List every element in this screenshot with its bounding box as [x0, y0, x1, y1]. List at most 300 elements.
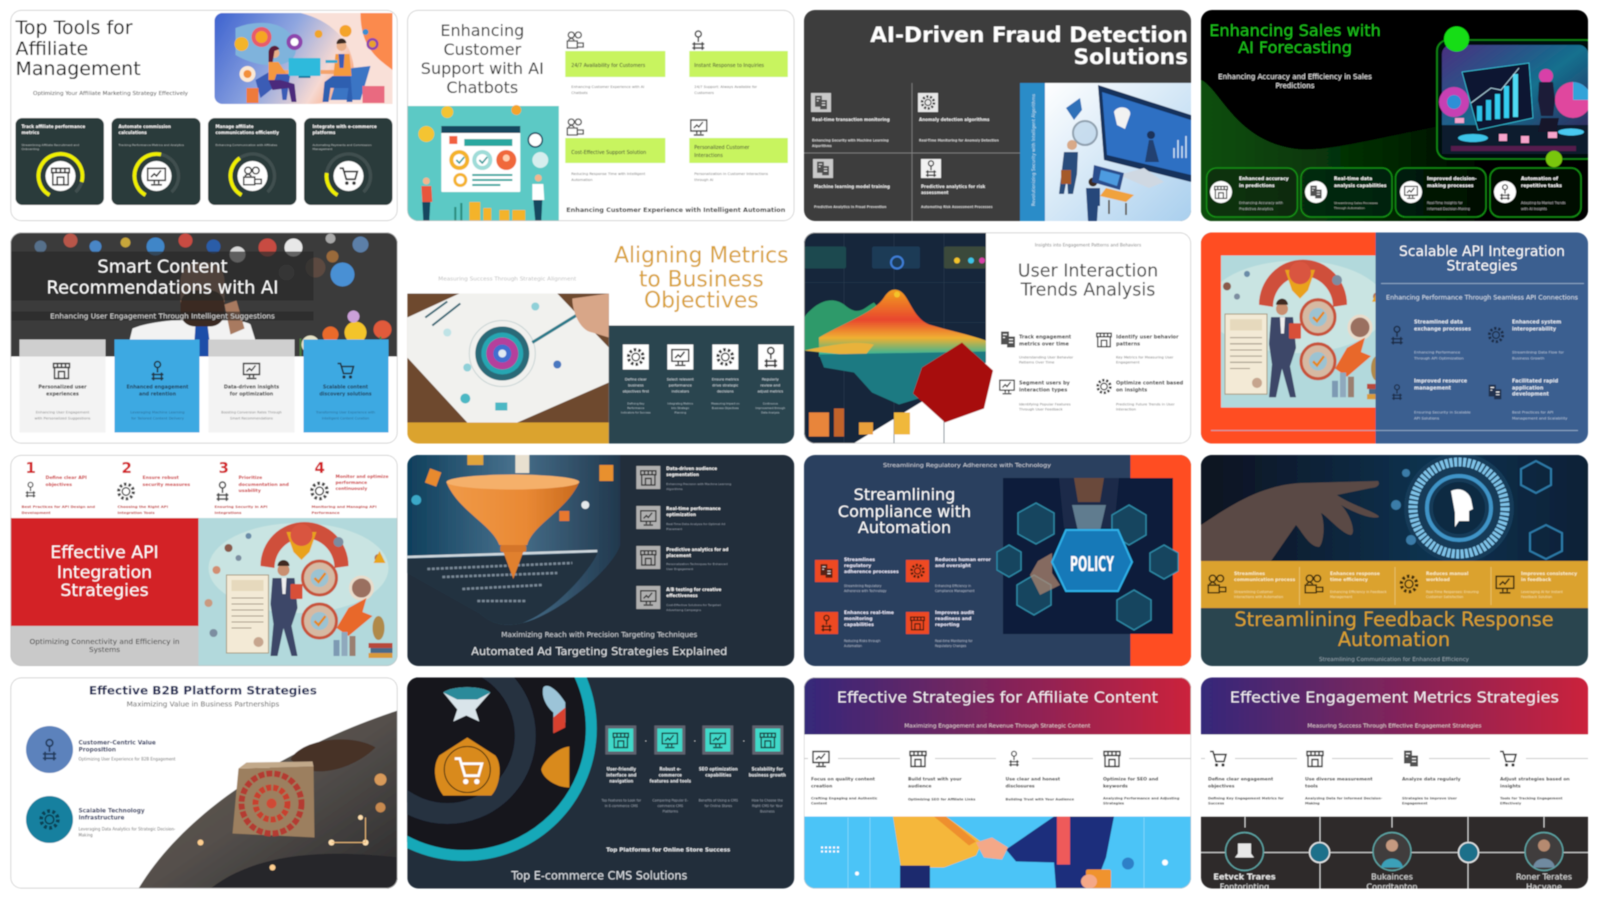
item: Use clear and honest disclosures [1006, 751, 1075, 802]
step: SEO optimization capabilities: for Online Stores [704, 804, 732, 808]
item: Enhanced accuracy in predictions: Enhanced accuracy [1239, 176, 1289, 182]
panel: Aligning Metrics to Business Objectives [407, 232, 794, 444]
title: Chatbots [446, 78, 518, 97]
step 1: Define clear API objectives: Best Practices for API Design and [22, 504, 95, 509]
item: Optimize content based on insights: on insights [1116, 388, 1147, 394]
item: Real-time transaction monitoring: Real-time transaction monitoring [812, 117, 890, 122]
item: Enhances real-time monitoring capabilities: monitoring [844, 616, 873, 622]
title: Automation [1338, 628, 1450, 651]
item: Improved resource management: management [1414, 386, 1452, 392]
panel: User Interaction Trends Analysis [804, 232, 1191, 444]
step 2: Ensure robust security measures [118, 459, 190, 515]
item: Enhances response time efficiency: Management [1330, 595, 1353, 599]
column: Personalized user experiences: with Personalized Suggestions [35, 416, 91, 420]
item: Real-time data analysis capabilities: analysis capabilities [1334, 183, 1387, 189]
column: Personalized user experiences [20, 340, 106, 432]
title: AI Forecasting [1238, 38, 1352, 57]
illustration: quality assurance businessman [198, 518, 398, 666]
item: Adjust strategies based on insights: insights [1500, 784, 1521, 790]
item: Improves consistency in feedback [1496, 571, 1577, 599]
item: Analyze data regularly [1402, 750, 1461, 806]
item: Reduces manual workload [1401, 571, 1479, 599]
step 1: Define clear API objectives [22, 459, 95, 515]
item: Streamlines communication process: communication process [1234, 577, 1295, 583]
subtitle: Streamlining Regulatory Adherence with Technology [883, 463, 1052, 469]
subtitle band: Enhancing User Engagement Through Intelligent Suggestions [50, 312, 275, 320]
item: A/B testing for creative effectiveness: Advertising Campaigns [666, 608, 701, 612]
item: Predictive analytics for risk assessment: Automating Risk Assessment Processes [921, 205, 993, 209]
title: Solutions [1074, 45, 1188, 70]
item: Streamlines communication process: Streamlining Customer [1234, 590, 1274, 594]
photo: orange funnel above laptop [407, 455, 620, 625]
item: Analyze data regularly: Engagement [1402, 802, 1428, 806]
item: Use diverse measurement tools [1305, 752, 1383, 806]
item: Automation of repetitive tasks: Automation of [1521, 176, 1559, 182]
item: Streamlines communication process: Streamlines [1234, 571, 1265, 577]
item: Focus on quality content creation: Content [811, 802, 827, 806]
step 4: Monitor and optimize performance continuously: Monitoring and Managing API [312, 504, 377, 509]
item: Optimize for SEO and keywords: Analyzing Performance and Adjusting [1103, 796, 1180, 800]
panel: Effective B2B Platform Strategies [10, 678, 398, 888]
title: Automated Ad Targeting Strategies Explained [471, 646, 727, 658]
title band: Smart Content [97, 256, 228, 278]
metric: Ensure metrics drive strategic decisions: drive strategic [712, 384, 738, 388]
step: SEO optimization capabilities: Benefits of Using a CMS [699, 798, 738, 802]
item: Segment users by interaction types: Identifying Popular Features [1019, 402, 1071, 406]
title: Strategies [1447, 258, 1517, 274]
vertical blue band with tagline: Revolutionizing Security with Intelligent Algorithms [1031, 93, 1037, 206]
item: Improves audit readiness and reporting: Real-time Monitoring for [935, 639, 973, 643]
panel: Automated Ad Targeting Strategies Explained [407, 455, 794, 666]
item: Improves audit readiness and reporting: Improves audit [935, 610, 975, 616]
metric: Select relevant performance indicators: performance [669, 384, 693, 388]
item: Enhances response time efficiency: Enhances response [1330, 571, 1380, 577]
step 2: Ensure robust security measures: Integration Tools [118, 510, 155, 515]
item: Customer-Centric Value Proposition: Customer-Centric Value [78, 740, 156, 746]
title: AI-Driven Fraud Detection [870, 23, 1188, 48]
panel: Effective Strategies for Affiliate Content [804, 678, 1191, 888]
item: Instant Response to Inquiries [689, 31, 788, 95]
item: Use diverse measurement tools: Making [1305, 802, 1320, 806]
panel: Top Tools for Affiliate Management [10, 10, 398, 221]
item: Identify user behavior patterns [1097, 333, 1179, 364]
item: Build trust with your audience: Build trust with your [908, 776, 962, 782]
item: Streamlines regulatory adherence processes: Streamlining Regulatory [844, 584, 882, 588]
item: Optimize content based on insights: Interaction [1116, 408, 1137, 412]
item: Segment users by interaction types: interaction types [1019, 388, 1067, 394]
item: Data-driven audience segmentation: Enhancing Precision with Machine Learning [666, 482, 731, 486]
column: Personalized user experiences: Enhancing User Engagement [36, 410, 90, 414]
title block [10, 518, 198, 626]
item: Enhances response time efficiency: time efficiency [1330, 577, 1368, 583]
metric: Ensure metrics drive strategic decisions: Ensure metrics [712, 378, 739, 382]
step: Scalability for business growth [749, 726, 786, 814]
item: Track engagement metrics over time: metrics over time [1019, 342, 1069, 348]
item: Real-time performance optimization: Placement [666, 527, 683, 531]
item: Cost-Effective Support Solution: Automation [571, 178, 593, 182]
item: Enhanced accuracy in predictions: Predictive Analytics [1239, 207, 1273, 211]
item: Enhanced system interoperability: Streamlining Data Flow for [1512, 350, 1564, 354]
item: 24/7 Availability for Customers: Enhancing Customer Experience with AI [571, 85, 644, 89]
item: Define clear engagement objectives: Defining Key Engagement Metrics for [1208, 796, 1284, 800]
subtitle: Predictions [1276, 81, 1315, 90]
header gradient band: Measuring Success Through Effective Engagement Strategies [1307, 724, 1482, 730]
item: Predictive analytics for ad placement: placement [666, 553, 691, 558]
item: Cost-Effective Support Solution: Reducing Response Time with Intelligent [571, 172, 646, 176]
step 4: Monitor and optimize performance continuously: Monitor and optimize [336, 474, 388, 480]
item: Enhances real-time monitoring capabilities: Reducing Risks through [844, 639, 881, 643]
item: Predictive analytics for risk assessment: Predictive analytics for risk [921, 184, 986, 189]
step: User-friendly interface and navigation: navigation [609, 778, 633, 784]
subtitle: Insights into Engagement Patterns and Behaviors [1035, 242, 1142, 248]
feature card: Integrate with e-commerce platforms: Integrate with e-commerce [312, 124, 377, 129]
item: Define clear engagement objectives: Success [1208, 802, 1224, 806]
step: SEO optimization capabilities: SEO optimization [699, 766, 738, 772]
photo: connected people network: Roner Terates [1516, 872, 1572, 882]
item: Improved decision-making processes [1396, 168, 1486, 217]
title: Customer [443, 40, 522, 59]
title: to Business [639, 268, 764, 292]
item: Reduces human error and oversight: Compliance Management [935, 589, 975, 593]
footer tagline: Enhancing Customer Experience with Intelligent Automation [566, 208, 785, 214]
step 3: Prioritize documentation and usability: Ensuring Security in API [214, 504, 268, 509]
metric: Select relevant performance indicators: Planning [675, 410, 686, 414]
item: Real-time transaction monitoring: Enhancing Security with Machine Learning [812, 138, 889, 142]
step 3: Prioritize documentation and usability: usability [238, 488, 261, 494]
item: Improved resource management: API Solutions [1414, 416, 1439, 420]
step: Scalability for business growth: Business [760, 810, 775, 814]
feature card: Manage affiliate communications efficiently: Enhancing Communication with Affiliates [216, 143, 278, 147]
step 2: Ensure robust security measures: 2 [122, 459, 132, 477]
item: Use diverse measurement tools: Use diverse measurement [1305, 776, 1373, 782]
item: Focus on quality content creation: Focus on quality content [811, 776, 876, 782]
feature card: Manage affiliate communications efficiently [208, 118, 296, 206]
step 2: Ensure robust security measures: Choosing the Right API [118, 504, 169, 509]
item: Improved resource management [1392, 378, 1471, 420]
feature card: Automate commission calculations: Tracking Performance Metrics and Analytics [118, 143, 184, 147]
item: Improves consistency in feedback: Leveraging AI for Instant [1521, 590, 1564, 594]
column: Scalable content discovery solutions: Intelligent Content Curation [322, 416, 369, 420]
item: 24/7 Availability for Customers: Chatbots [571, 91, 588, 95]
title block: Strategies [60, 581, 149, 601]
item: Enhanced accuracy in predictions [1207, 168, 1297, 217]
photo: hand touching holographic support icon [1201, 453, 1588, 563]
item: Automation of repetitive tasks: with AI Insights [1521, 207, 1547, 211]
item: Real-time performance optimization: Real-time performance [666, 506, 721, 511]
item: Streamlined data exchange processes: Enhancing Performance [1414, 350, 1461, 354]
step: User-friendly interface and navigation [601, 726, 642, 808]
item: Personalized Customer Interactions: through AI [694, 178, 713, 182]
panel: Top E-commerce CMS Solutions [337, 602, 794, 888]
item: Customer-Centric Value Proposition: Optimizing User Experience for B2B Engagement [78, 756, 176, 762]
subtitle: Maximizing Reach with Precision Targeting Techniques [501, 631, 698, 639]
grid lines [804, 83, 1020, 221]
timeline connectors [804, 758, 1191, 760]
subtitle: Streamlining Communication for Enhanced Efficiency [1319, 657, 1469, 663]
column: Data-driven insights for optimization: Smart Recommendations [230, 416, 273, 420]
item: Define clear engagement objectives: objectives [1208, 784, 1235, 790]
item: Personalized Customer Interactions [689, 120, 788, 182]
item: Reduces manual workload: workload [1426, 577, 1450, 583]
item: Improved resource management: Improved resource [1414, 378, 1468, 384]
item: Optimize for SEO and keywords: Strategies [1103, 802, 1124, 806]
metric: Define clear business objectives first: Indicators for Success [621, 410, 651, 414]
item: Personalized Customer Interactions: Personalized Customer [694, 145, 749, 151]
metric: Define clear business objectives first: Defining Key [627, 402, 645, 406]
item: Streamlined data exchange processes [1391, 320, 1471, 360]
item: Track engagement metrics over time [1001, 332, 1074, 364]
item: Enhances real-time monitoring capabilities [815, 610, 894, 648]
metric: Regularly review and adjust metrics: Regularly [762, 378, 780, 382]
item: Real-time transaction monitoring [811, 93, 890, 148]
step: User-friendly interface and navigation: in E-commerce CMS [605, 804, 638, 808]
item: Facilitated rapid application development: Best Practices for API [1512, 410, 1553, 414]
item: Improved decision-making processes: Real-Time Insights for [1427, 201, 1463, 205]
feature card: Manage affiliate communications efficiently: Manage affiliate [216, 124, 254, 129]
feature card: Track affiliate performance metrics: Streamlining Affiliate Recruitment and [22, 143, 79, 147]
column: Data-driven insights for optimization [208, 340, 294, 432]
column: Scalable content discovery solutions [304, 340, 388, 432]
title: Objectives [644, 288, 759, 314]
panel: Streamlining Feedback Response Automation [1201, 453, 1588, 666]
title: User Interaction [1018, 262, 1158, 282]
vertical blue band with tagline [1020, 83, 1046, 221]
item: Streamlines regulatory adherence processes: regulatory [844, 563, 871, 569]
decorative lime circle [1546, 151, 1562, 167]
item: Anomaly detection algorithms: Real-Time Monitoring for Anomaly Detection [919, 138, 999, 142]
column: Data-driven insights for optimization: Boosting Conversion Rates Through [221, 410, 282, 414]
photo: connected people network: Conrdtanton [1366, 882, 1418, 892]
item: Optimize for SEO and keywords: Optimize for SEO and [1103, 776, 1158, 782]
item: Automation of repetitive tasks: repetitive tasks [1521, 183, 1562, 189]
title: Compliance with [838, 502, 971, 521]
item: Streamlined data exchange processes: Through API Optimization [1413, 356, 1464, 360]
column: Enhanced engagement and retention: Leveraging Machine Learning [130, 410, 185, 414]
item: Cost-Effective Support Solution: Cost-Effective Support Solution [571, 150, 646, 156]
item: A/B testing for creative effectiveness: Cost-Effective Solutions for Targeted [666, 603, 721, 607]
orange left block [1201, 232, 1376, 444]
gold feature band [1201, 561, 1588, 608]
item: Personalized Customer Interactions: Personalization in Customer Interactions [694, 172, 768, 176]
column: Data-driven insights for optimization: Data-driven insights [224, 384, 279, 390]
panel: Scalable API Integration Strategies [1197, 232, 1588, 444]
step 4: Monitor and optimize performance continuously: continuously [336, 486, 367, 492]
photo: policy hexagons [997, 478, 1178, 634]
step: Robust e-commerce features and tools: commerce [659, 772, 682, 778]
title: Affiliate [16, 38, 88, 60]
subtitle block: Systems [89, 645, 120, 654]
subtitle: Top Platforms for Online Store Success [606, 848, 731, 854]
item: Improves consistency in feedback: Feedback Solution [1521, 595, 1552, 599]
step 4: Monitor and optimize performance continuously: performance [336, 480, 367, 486]
metric: Regularly review and adjust metrics: adjust metrics [757, 390, 783, 394]
metric: Define clear business objectives first: business [628, 384, 644, 388]
metric: Regularly review and adjust metrics: review and [760, 384, 780, 388]
item: Track engagement metrics over time: Track engagement [1019, 334, 1072, 340]
title: Top Tools for [14, 17, 133, 39]
item: Optimize for SEO and keywords [1103, 752, 1180, 806]
title: Effective B2B Platform Strategies [89, 684, 317, 698]
column: Enhanced engagement and retention: for Tailored Content Delivery [131, 416, 185, 420]
title: Support with AI [421, 59, 544, 78]
item: Streamlines regulatory adherence processes: Streamlines [844, 557, 875, 563]
item: Track engagement metrics over time: Patterns Over Time [1019, 360, 1055, 364]
feature card: Automate commission calculations [112, 118, 200, 206]
step: User-friendly interface and navigation: interface and [606, 772, 637, 778]
illustration: business handshake [804, 816, 1191, 888]
item: Reduces human error and oversight: and oversight [935, 563, 972, 569]
item: Streamlines regulatory adherence processes [815, 557, 899, 593]
item: Machine learning model training: Machine learning model training [814, 184, 890, 189]
item: Anomaly detection algorithms [918, 93, 999, 142]
item: Real-time data analysis capabilities: Real-time data [1334, 176, 1372, 182]
step 3: Prioritize documentation and usability [214, 459, 289, 515]
background photo: man with social bubbles and flowers [10, 232, 398, 356]
item: Identify user behavior patterns: Engagement [1116, 360, 1140, 364]
item: Real-time transaction monitoring: Algorithms [812, 144, 832, 148]
item: Identify user behavior patterns: Key Metrics for Measuring User [1116, 356, 1174, 360]
step 3: Prioritize documentation and usability: Prioritize [238, 475, 262, 481]
step 4: Monitor and optimize performance continuously: Performance [312, 510, 340, 515]
item: Enhanced system interoperability: interoperability [1512, 326, 1557, 332]
item: Facilitated rapid application development [1489, 378, 1568, 420]
step 3: Prioritize documentation and usability: 3 [218, 459, 229, 477]
title block: Effective API [50, 543, 159, 563]
illustration: two people at a table [214, 13, 392, 104]
item: Track engagement metrics over time: Understanding User Behavior [1019, 356, 1074, 360]
item: Streamlined data exchange processes: Streamlined data [1414, 320, 1463, 326]
subtitle block: Optimizing Connectivity and Efficiency in [29, 637, 180, 646]
item: Facilitated rapid application development: Facilitated rapid [1512, 378, 1559, 384]
item: Real-time performance optimization: optimization [666, 512, 696, 517]
item: Predictive analytics for ad placement [636, 546, 728, 571]
item: Improves consistency in feedback: in feedback [1521, 577, 1552, 583]
step: Scalability for business growth: Right CMS for Your [752, 804, 783, 808]
item: Identify user behavior patterns: patterns [1116, 342, 1140, 348]
illustration: sales chart and robot [1437, 40, 1597, 159]
title: Top E-commerce CMS Solutions [510, 870, 687, 882]
item: Enhanced system interoperability: Enhanced system [1512, 320, 1561, 326]
item: Enhances response time efficiency [1305, 571, 1387, 599]
item: Scalable Technology Infrastructure: Leveraging Data Analytics for Strategic Decision- [78, 826, 176, 832]
item: Scalable Technology Infrastructure: Making [78, 832, 93, 838]
item: Real-time performance optimization [636, 506, 725, 531]
item: Predictive analytics for ad placement: User Engagement [666, 567, 694, 571]
item: Optimize content based on insights [1098, 380, 1184, 412]
column: Enhanced engagement and retention: Enhanced engagement [127, 384, 189, 390]
photo: connected people network: Eetvck Trares [1213, 872, 1276, 882]
item: Data-driven audience segmentation [636, 466, 731, 491]
step: SEO optimization capabilities [699, 726, 738, 808]
item: Scalable Technology Infrastructure: Scalable Technology [78, 808, 145, 814]
item: Reduces human error and oversight: Reduces human error [935, 557, 991, 563]
column: Scalable content discovery solutions: discovery solutions [319, 392, 372, 398]
decorative red hexagon [913, 342, 993, 422]
item: Streamlines regulatory adherence processes: adherence processes [844, 569, 899, 575]
item: Improves audit readiness and reporting: reporting [935, 622, 959, 628]
photo: hand drawing a target diagram [407, 294, 609, 422]
item: Enhanced system interoperability: Business Growth [1512, 356, 1545, 360]
item: Automation of repetitive tasks [1490, 168, 1581, 217]
panel: Smart Content Recommendations with AI [10, 232, 398, 444]
step: Scalability for business growth: How to Choose the [752, 798, 783, 802]
header gradient band: Maximizing Engagement and Revenue Through Strategic Content [904, 724, 1091, 730]
feature card: Track affiliate performance metrics: Onboarding [22, 147, 39, 151]
column: Personalized user experiences: experiences [46, 392, 79, 398]
item: Real-time performance optimization: Real-Time Data Analysis for Optimal Ad [666, 522, 725, 526]
item: Adjust strategies based on insights: Effectively [1500, 802, 1522, 806]
item: Enhances real-time monitoring capabilities: Enhances real-time [844, 610, 894, 616]
metric: Define clear business objectives first [621, 344, 651, 414]
item: Data-driven audience segmentation: Algorithms [666, 487, 683, 491]
item: Use diverse measurement tools: Analyzing Data for Informed Decision- [1305, 796, 1383, 800]
title: Streamlining [854, 485, 955, 504]
item: Identify user behavior patterns: Identify user behavior [1116, 334, 1179, 340]
item: Adjust strategies based on insights: Tools for Tracking Engagement [1500, 796, 1563, 800]
item: Real-time data analysis capabilities: Streamlining Sales Processes [1334, 201, 1378, 205]
column: Scalable content discovery solutions: Scalable content [323, 384, 369, 390]
item: Customer-Centric Value Proposition [26, 726, 176, 773]
item: Anomaly detection algorithms: Anomaly detection algorithms [919, 117, 990, 122]
feature card: Track affiliate performance metrics [16, 118, 104, 206]
metric: Ensure metrics drive strategic decisions [711, 344, 740, 410]
item: A/B testing for creative effectiveness: effectiveness [666, 593, 698, 598]
item: Enhanced accuracy in predictions: in predictions [1239, 183, 1275, 189]
title: Automation [858, 518, 951, 537]
item: Improves audit readiness and reporting: Regulatory Changes [935, 644, 967, 648]
item: Personalized Customer Interactions: Interactions [694, 153, 723, 159]
step: Robust e-commerce features and tools: Platforms [662, 810, 678, 814]
item: Reduces manual workload: Customer Satisfaction [1426, 595, 1463, 599]
feature card: Integrate with e-commerce platforms [304, 118, 392, 206]
dark panel with four metrics [609, 326, 794, 444]
title: Enhancing [440, 21, 524, 40]
item: Streamlined data exchange processes: exchange processes [1414, 326, 1471, 332]
step 2: Ensure robust security measures: Ensure robust [142, 475, 180, 481]
item: Data-driven audience segmentation: Data-driven audience [666, 466, 717, 471]
gold strip [407, 422, 609, 444]
item: Streamlines regulatory adherence processes: Adherence with Technology [844, 589, 887, 593]
subtitle: Optimizing Your Affiliate Marketing Strategy Effectively [33, 91, 189, 97]
item: Machine learning model training: Predictive Analytics in Fraud Prevention [814, 205, 887, 209]
item: Data-driven audience segmentation: segmentation [666, 472, 699, 477]
feature card: Track affiliate performance metrics: Track affiliate performance [22, 124, 85, 129]
feature card: Manage affiliate communications efficiently: communications efficiently [216, 130, 279, 135]
item: Improved decision-making processes: making processes [1427, 183, 1474, 189]
step: SEO optimization capabilities: capabilities [705, 772, 732, 778]
metric: Regularly review and adjust metrics: Continuous [763, 402, 778, 406]
photo: connected people network [1201, 816, 1588, 892]
item: Focus on quality content creation: creation [811, 784, 832, 790]
panel: Streamlining Compliance with Automation [804, 455, 1191, 666]
feature card: Automate commission calculations: Automate commission [118, 124, 171, 129]
item: Streamlines communication process: Interactions with Automation [1234, 595, 1283, 599]
metric: Regularly review and adjust metrics: Data Analysis [761, 410, 780, 414]
item: Automation of repetitive tasks: Adapting to Market Trends [1521, 201, 1566, 205]
item: 24/7 Availability for Customers: 24/7 Availability for Customers [571, 63, 646, 69]
green wave background [1201, 80, 1588, 221]
photo: connected people network: Hacvane [1526, 882, 1562, 892]
item: Use clear and honest disclosures: disclosures [1006, 784, 1035, 790]
feature card: Integrate with e-commerce platforms: Automating Payments and Commission [312, 143, 372, 147]
item: Facilitated rapid application development: Management and Scalability [1512, 416, 1568, 420]
item: Enhances response time efficiency: Enhancing Efficiency in Feedback [1330, 590, 1387, 594]
illustration: quality assurance businessman [1220, 254, 1376, 408]
metric: Define clear business objectives first: Define clear [625, 378, 647, 382]
photo: connected people network: Fontorinting [1220, 882, 1269, 892]
step: Robust e-commerce features and tools: commerce CMS [657, 804, 683, 808]
item: Segment users by interaction types: Through User Feedback [1018, 408, 1063, 412]
